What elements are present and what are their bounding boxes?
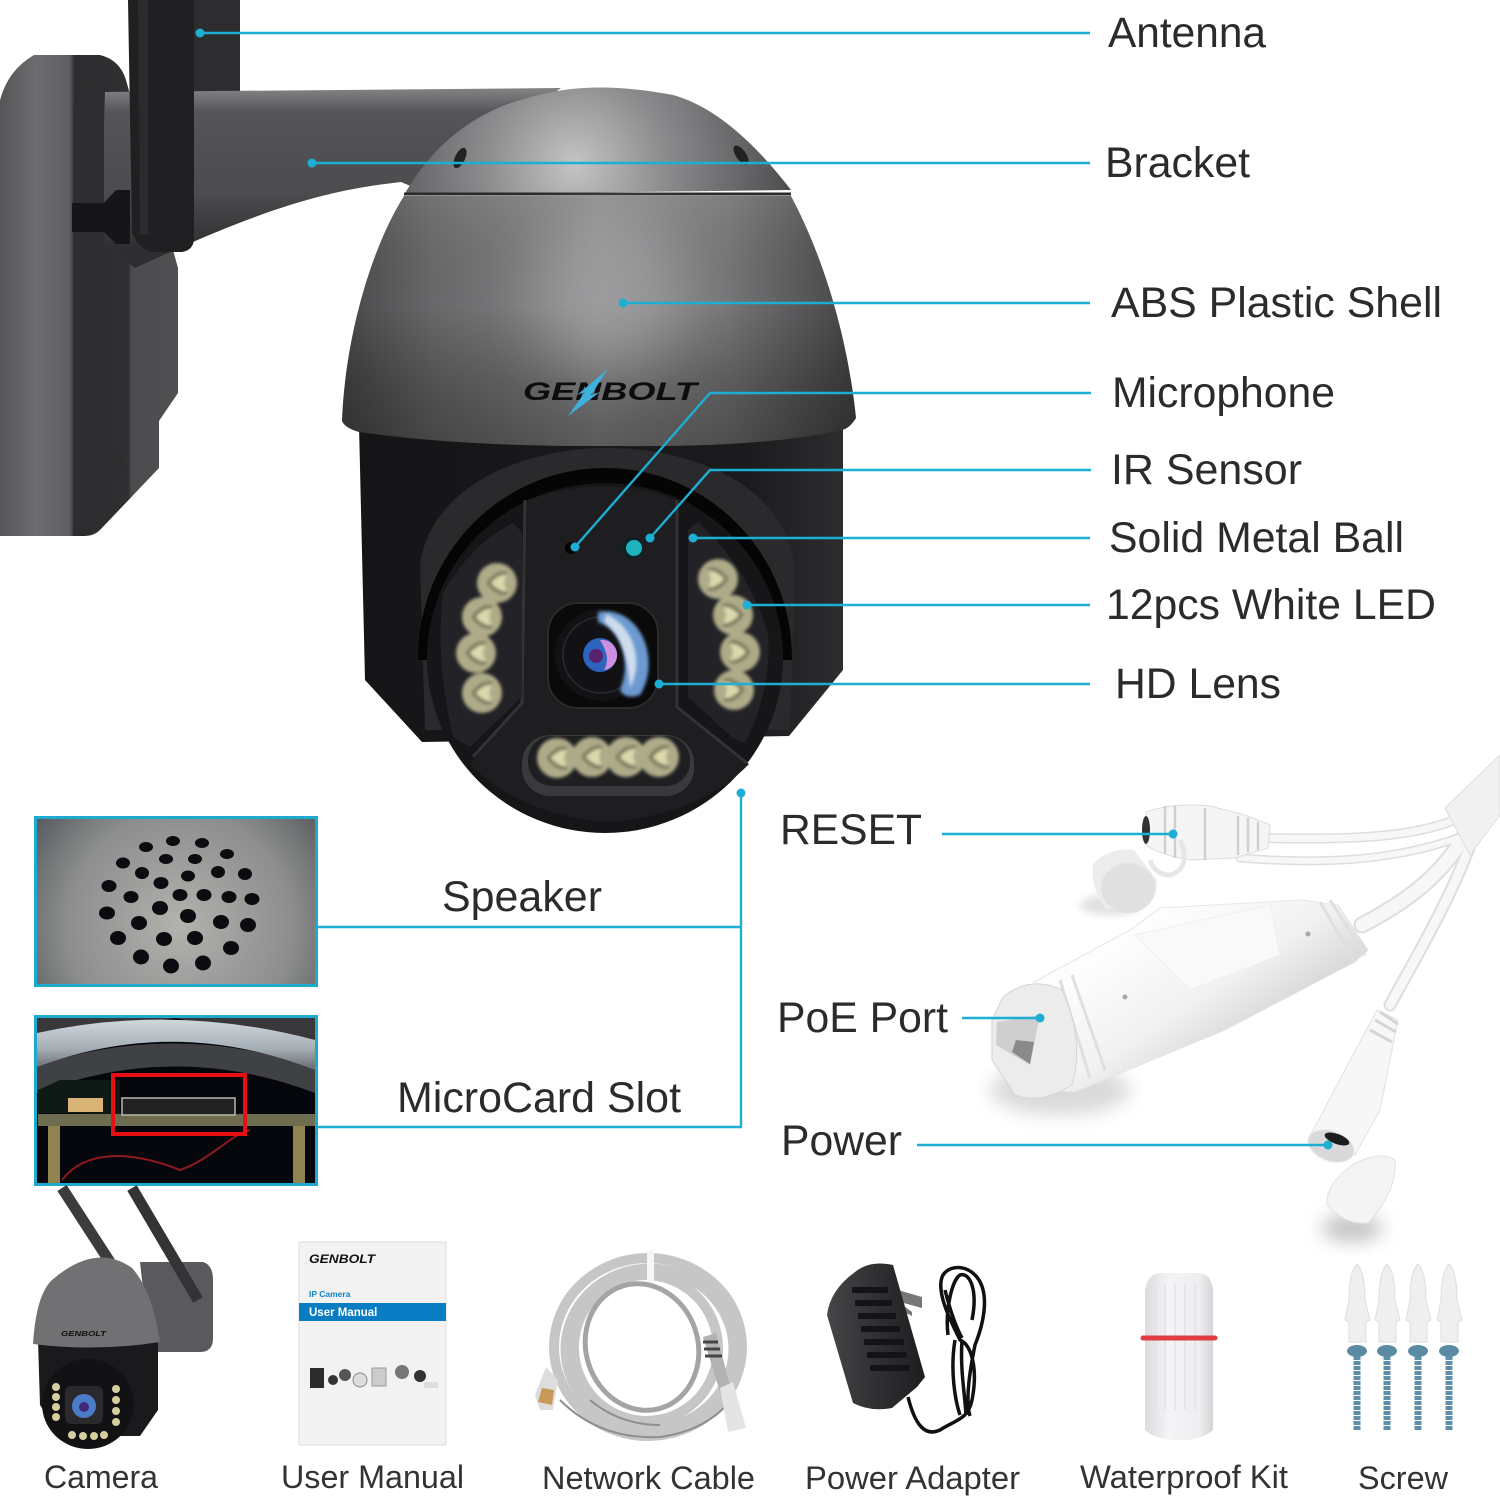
logo: GENBOLT — [523, 378, 701, 406]
leader: Speaker and MicroCard — [317, 788, 746, 1127]
left LED panel — [441, 523, 522, 747]
hood inner shadow — [418, 468, 792, 660]
power socket — [1303, 1124, 1359, 1168]
manual product row — [310, 1365, 438, 1388]
accessory: network cable — [535, 1250, 746, 1437]
antenna highlight — [138, 0, 148, 235]
dome vents — [451, 143, 751, 170]
board legs — [48, 1126, 305, 1183]
label: IR Sensor: IR Sensor — [1111, 447, 1302, 494]
adapter ribs — [852, 1290, 910, 1368]
wall anchors — [1345, 1264, 1462, 1342]
antenna front — [128, 0, 194, 252]
circuit board — [38, 1114, 315, 1126]
label: Power: Power — [781, 1118, 902, 1165]
leader: Solid Metal Ball — [688, 534, 1090, 542]
mini plate — [140, 1262, 213, 1352]
label: Speaker: Speaker — [442, 874, 602, 921]
metal ball — [427, 483, 783, 833]
leader: Power — [917, 1140, 1332, 1150]
mini logo: GENBOLT — [61, 1329, 108, 1338]
screw heads — [1347, 1345, 1459, 1357]
label: Waterproof Kit: Waterproof Kit — [1080, 1459, 1288, 1495]
leader: IR Sensor — [646, 470, 1091, 542]
red seal ring — [1143, 1336, 1215, 1340]
inset: speaker grille — [36, 818, 316, 986]
leader: PoE Port — [962, 1014, 1044, 1022]
tube dots — [1122, 932, 1310, 1000]
right plug head — [720, 1382, 746, 1432]
label: Antenna: Antenna — [1108, 10, 1266, 57]
reset cap face — [1101, 863, 1155, 913]
label: Solid Metal Ball: Solid Metal Ball — [1109, 515, 1404, 562]
screw shafts — [1357, 1356, 1449, 1430]
accessory: waterproof kit — [1143, 1273, 1215, 1440]
inset: microcard slot — [36, 1016, 316, 1184]
mini ball — [42, 1359, 134, 1449]
accessory: camera — [33, 1188, 213, 1449]
label: Network Cable: Network Cable — [542, 1460, 755, 1496]
mini shell — [33, 1257, 160, 1348]
mini LEDs — [52, 1383, 120, 1440]
speaker holes — [99, 836, 260, 974]
label: 12pcs White LED: 12pcs White LED — [1106, 582, 1436, 629]
accessory: screws — [1345, 1264, 1462, 1430]
coil shadow lines — [560, 1395, 735, 1437]
mini lens — [65, 1386, 103, 1424]
microphone hole — [565, 542, 577, 554]
center plate — [470, 486, 749, 822]
RJ45 pins — [1012, 1040, 1034, 1064]
label: Screw: Screw — [1358, 1460, 1449, 1496]
cables — [1240, 815, 1472, 1005]
manual title: User Manual — [309, 1307, 377, 1319]
shell highlight — [535, 210, 685, 370]
power cap — [1327, 1156, 1395, 1223]
leader: ABS Plastic Shell — [618, 298, 1090, 308]
RJ45 socket — [996, 1015, 1040, 1065]
right plug — [703, 1333, 730, 1392]
reset grooves — [1165, 806, 1258, 860]
label: MicroCard Slot: MicroCard Slot — [397, 1075, 681, 1122]
splitter — [1445, 755, 1500, 855]
leader: White LED — [742, 600, 1090, 610]
left LEDs — [456, 563, 517, 713]
dark body — [359, 425, 843, 742]
logo — [523, 369, 701, 416]
red highlight box — [113, 1075, 245, 1134]
leader: RESET — [942, 830, 1178, 838]
kit ribs — [1155, 1285, 1205, 1410]
lens housing — [548, 603, 658, 708]
gold connector — [68, 1098, 103, 1112]
cable shadows — [990, 1065, 1130, 1115]
bottom LED panel — [522, 735, 694, 796]
plate ridges — [473, 500, 747, 763]
manual subtitle: IP Camera — [309, 1289, 351, 1299]
power socket centre — [1323, 1130, 1351, 1148]
label: Power Adapter: Power Adapter — [805, 1460, 1020, 1496]
mini antenna rear — [62, 1188, 110, 1262]
top corners — [37, 1018, 315, 1045]
accessory: user manual — [299, 1242, 446, 1445]
dome seam — [404, 192, 791, 196]
label: ABS Plastic Shell: ABS Plastic Shell — [1111, 280, 1442, 327]
leader: HD Lens — [654, 680, 1090, 688]
antenna rear — [194, 0, 240, 95]
lens — [555, 609, 649, 701]
plate ridge — [73, 80, 128, 536]
cables outline — [1240, 815, 1472, 1005]
bracket arm — [100, 88, 561, 268]
hood — [420, 448, 795, 730]
cord — [908, 1268, 984, 1432]
antenna knob — [72, 190, 130, 244]
right plug strain stripes — [703, 1342, 722, 1356]
mini body — [38, 1340, 158, 1436]
label: User Manual: User Manual — [281, 1459, 464, 1495]
IR sensor — [622, 537, 644, 559]
mounting plate — [0, 55, 178, 536]
PoE cable photo — [990, 755, 1500, 1242]
wire — [62, 1130, 250, 1180]
leader: Antenna — [196, 28, 1090, 38]
tube stripes — [1060, 900, 1365, 1078]
label: HD Lens: HD Lens — [1115, 661, 1281, 708]
right LED panel — [688, 522, 769, 743]
coil — [554, 1258, 742, 1436]
PoE tube — [1034, 900, 1368, 1092]
card slot — [122, 1098, 235, 1115]
shell — [342, 196, 856, 446]
leader: Bracket — [308, 158, 1090, 168]
manual logo: GENBOLT — [309, 1254, 376, 1266]
prongs — [898, 1290, 922, 1316]
adapter body — [827, 1264, 925, 1409]
housing shadow band — [37, 1043, 315, 1093]
manual title bar — [299, 1303, 446, 1321]
right LEDs — [698, 559, 760, 710]
leader: Microphone — [570, 393, 1091, 552]
mini antenna front — [132, 1188, 198, 1300]
reset pins — [1142, 816, 1150, 844]
shell dome upper — [404, 88, 791, 195]
tube raised block — [1135, 905, 1280, 990]
accessory: power adapter — [827, 1264, 984, 1432]
label: Microphone: Microphone — [1112, 370, 1335, 417]
silver housing arc — [37, 1020, 315, 1070]
power strain relief — [1370, 1012, 1398, 1042]
label: Bracket: Bracket — [1105, 140, 1250, 187]
reset cap — [1092, 850, 1157, 913]
left plug pins — [538, 1388, 554, 1405]
reset tether — [1150, 840, 1184, 875]
label: RESET: RESET — [780, 807, 922, 854]
power cable connector — [1308, 1010, 1398, 1155]
label: PoE Port: PoE Port — [777, 995, 948, 1042]
label: Camera: Camera — [44, 1459, 158, 1495]
reset connector — [1146, 805, 1270, 860]
shell shade — [342, 196, 856, 446]
PoE port — [992, 984, 1077, 1098]
board green — [38, 1080, 120, 1114]
cable tie — [647, 1250, 654, 1282]
bottom LEDs — [537, 737, 679, 778]
bottom LED panel inner — [528, 736, 690, 786]
left plug — [535, 1367, 558, 1410]
main camera photo — [0, 0, 856, 848]
